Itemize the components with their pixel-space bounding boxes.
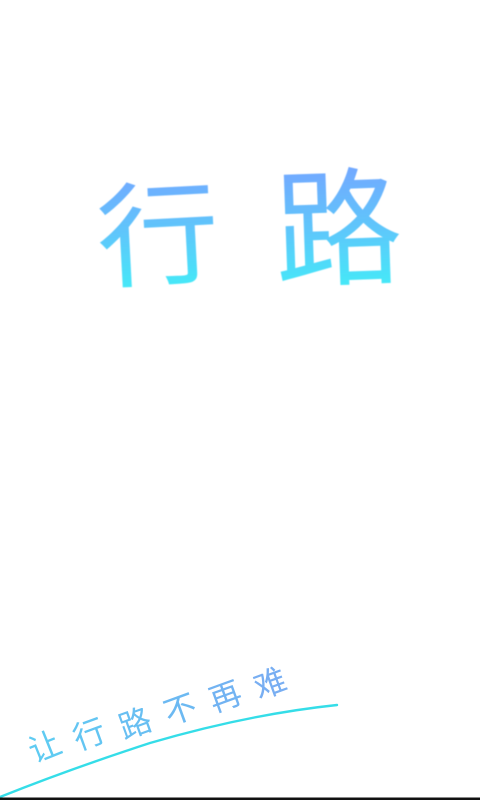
tagline: 路 (114, 701, 156, 746)
tagline: 让 (23, 724, 66, 769)
title: 行 (93, 171, 223, 304)
tagline: 再 (204, 674, 246, 719)
tagline: 行 (68, 712, 110, 757)
tagline: 难 (249, 661, 291, 706)
tagline: 不 (159, 687, 201, 732)
bottom edge bar (0, 798, 480, 800)
title: 路 (272, 158, 405, 305)
title (93, 158, 405, 305)
curved underline (0, 705, 337, 797)
tagline (23, 661, 291, 769)
